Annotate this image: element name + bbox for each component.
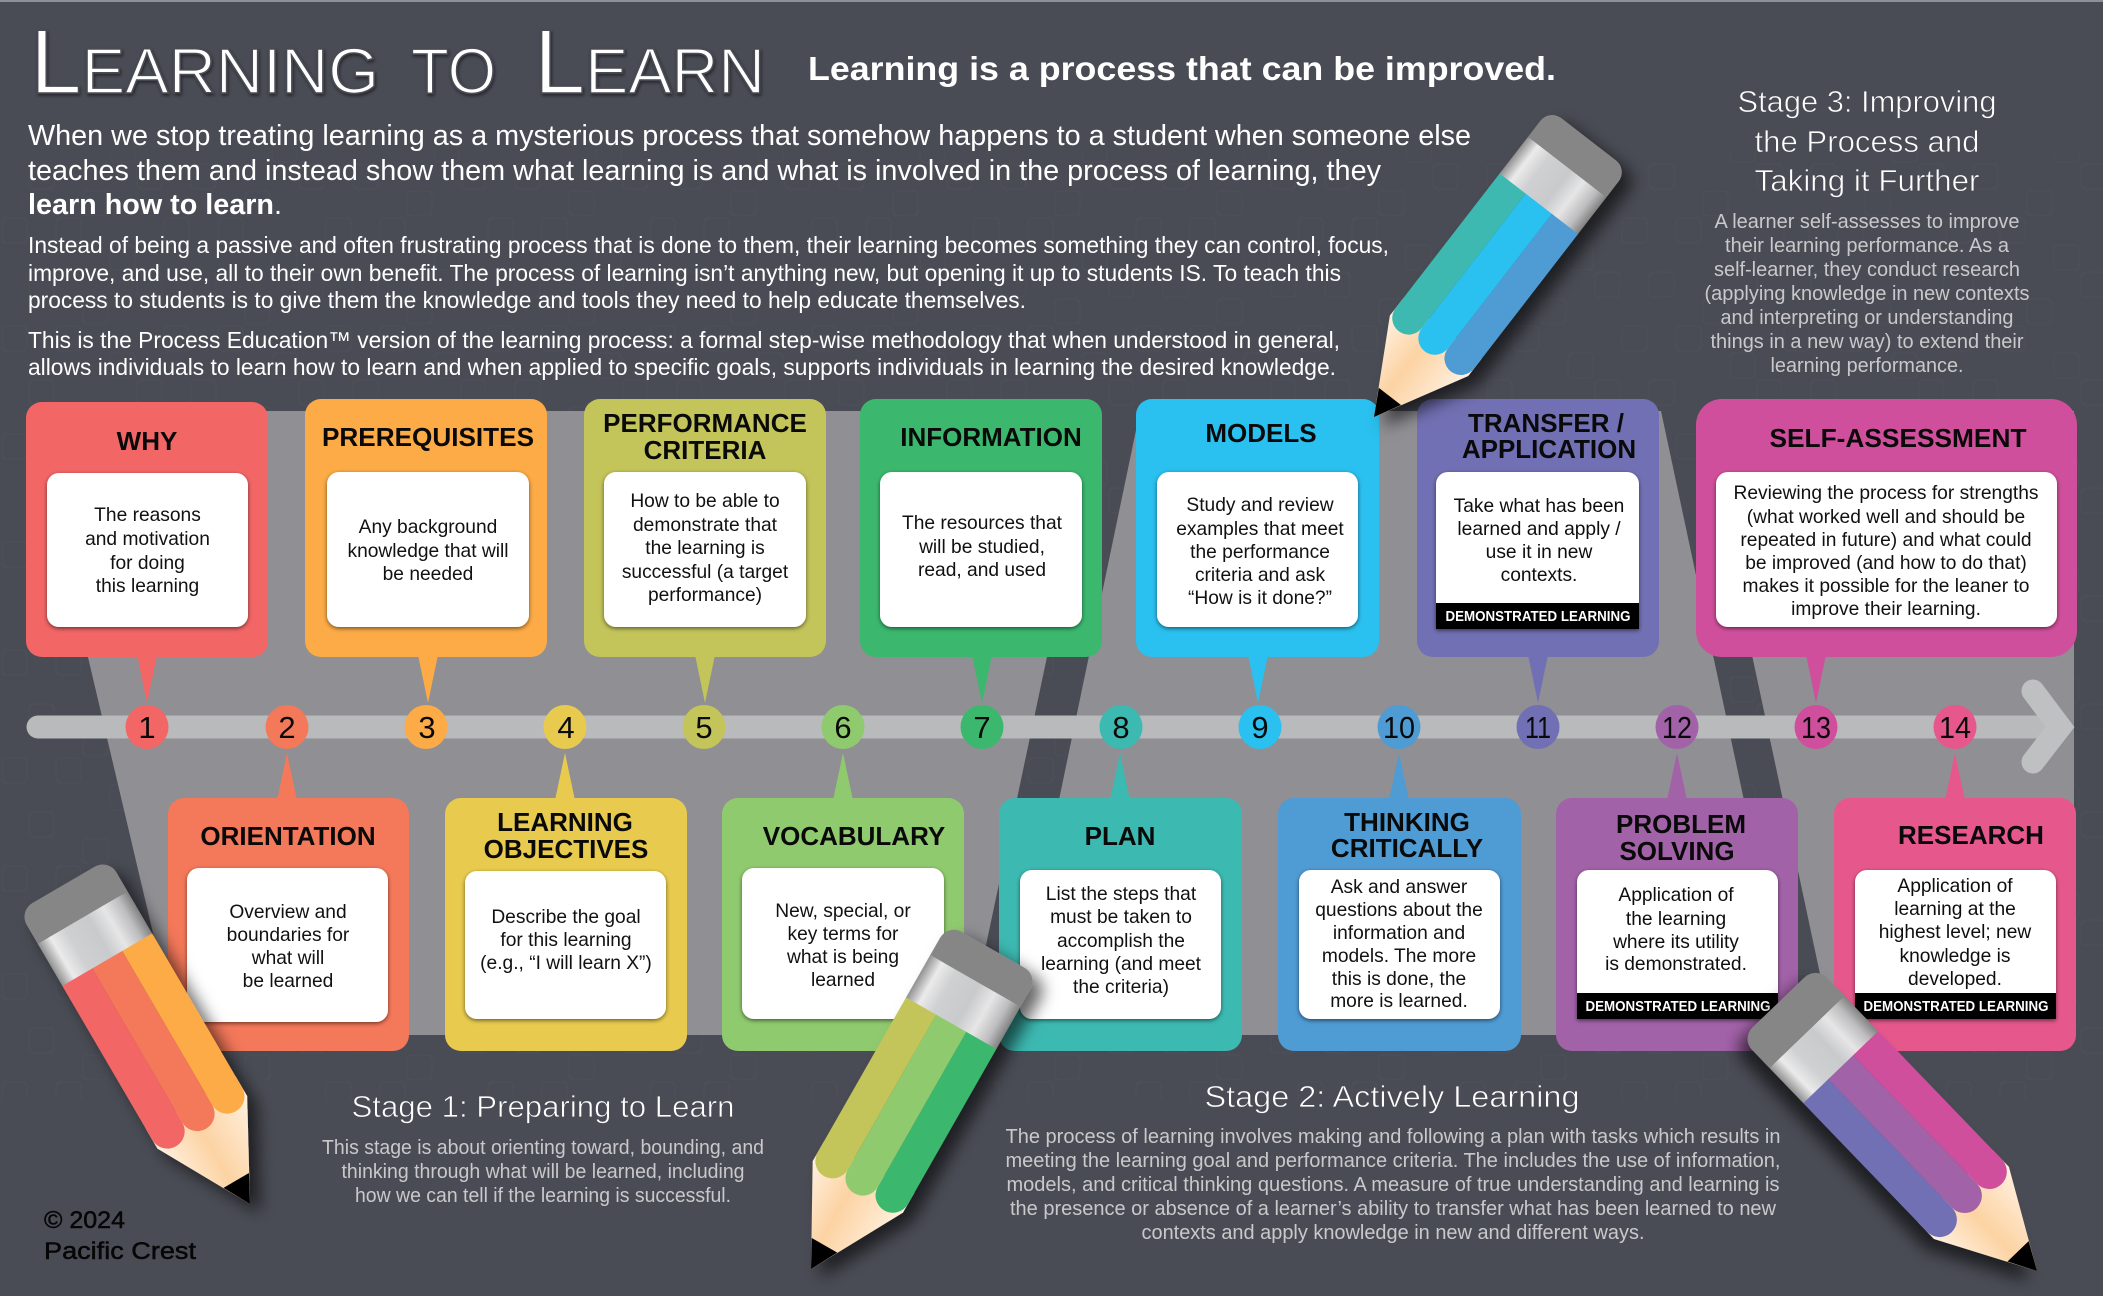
heading: ORIENTATION	[200, 821, 376, 851]
card: Ask and answer	[1331, 877, 1468, 898]
card	[880, 472, 1082, 627]
panel: step 14 research	[1834, 753, 2076, 1051]
panel: step 6 vocabulary	[722, 753, 964, 1051]
stage 2 description: models, and critical thinking questions. A measure of true understanding and learning is	[1006, 1174, 1780, 1196]
card	[1855, 870, 2056, 1019]
box	[1136, 399, 1379, 657]
timeline step numbers: 3	[418, 710, 436, 745]
card: accomplish the	[1057, 931, 1185, 952]
box	[168, 798, 409, 1051]
card: New, special, or	[775, 901, 911, 922]
card	[47, 473, 248, 627]
card: The resources that	[902, 513, 1063, 534]
card: (e.g., “I will learn X”)	[480, 953, 652, 974]
timeline step numbers: 1	[138, 710, 156, 745]
card: Reviewing the process for strengths	[1733, 483, 2039, 504]
card: “How is it done?”	[1188, 588, 1332, 609]
heading: THINKING	[1344, 807, 1470, 837]
heading: OBJECTIVES	[484, 834, 648, 864]
card: be needed	[383, 564, 473, 585]
body paragraph: process to students is to give them the knowledge and tools they need to help educate themselves.	[28, 287, 1026, 313]
timeline bar with arrow	[38, 691, 2060, 762]
heading: PLAN	[1085, 821, 1155, 851]
card: key terms for	[788, 924, 899, 945]
card: be learned	[243, 971, 333, 992]
panel: step 7 information	[860, 399, 1102, 703]
stage 1 description: how we can tell if the learning is successful.	[355, 1185, 731, 1207]
intro paragraph	[28, 120, 1471, 221]
title: LEARN	[534, 12, 765, 113]
heading: RESEARCH	[1898, 820, 2044, 850]
title: LEARNING	[30, 12, 379, 113]
box	[1417, 399, 1659, 657]
stage 3 description: self-learner, they conduct research	[1714, 259, 2020, 281]
panel: step 10 thinking critically	[1278, 753, 1521, 1051]
stage 1 description: This stage is about orienting toward, bounding, and	[322, 1137, 764, 1159]
pointer	[1388, 753, 1410, 805]
card: the performance	[1190, 542, 1330, 563]
card: highest level; new	[1879, 922, 2031, 943]
card: the learning	[1626, 909, 1726, 930]
subtitle: Learning is a process that can be improved.	[808, 50, 1556, 87]
heading: WHY	[117, 426, 177, 456]
heading	[484, 807, 648, 864]
box	[722, 798, 964, 1051]
stage 3 description	[1704, 211, 2030, 377]
card: where its utility	[1612, 932, 1739, 953]
card	[327, 472, 529, 627]
card: Study and review	[1186, 495, 1334, 516]
timeline step numbers: 4	[557, 710, 575, 745]
process education paragraph: This is the Process Education™ version of the learning process: a formal step-wise methodology that when understood in general,	[28, 327, 1340, 353]
card	[465, 871, 666, 1019]
card: the learning is	[645, 538, 765, 559]
copyright: © 2024	[44, 1207, 125, 1234]
card: must be taken to	[1050, 907, 1192, 928]
pointer	[1666, 753, 1688, 805]
card: Describe the goal	[491, 907, 641, 928]
heading: PREREQUISITES	[322, 422, 534, 452]
heading: PERFORMANCE	[603, 408, 807, 438]
card: learned and apply /	[1457, 519, 1621, 540]
stage 3 description: things in a new way) to extend their	[1710, 331, 2024, 353]
stage 3 heading: Taking it Further	[1754, 163, 1980, 198]
card: be improved (and how to do that)	[1745, 553, 2027, 574]
card	[1577, 870, 1778, 1019]
copyright	[44, 1207, 196, 1265]
card: How to be able to	[630, 491, 780, 512]
stage 3 heading: the Process and	[1754, 124, 1980, 159]
heading: PROBLEM	[1616, 809, 1746, 839]
stage 2 heading: Stage 2: Actively Learning	[1204, 1079, 1580, 1114]
card: Overview and	[229, 902, 347, 923]
card: for doing	[110, 553, 185, 574]
timeline step numbers: 12	[1662, 710, 1692, 745]
heading	[1462, 408, 1636, 464]
box	[1696, 399, 2077, 657]
card: and motivation	[85, 529, 210, 550]
pointer	[1805, 650, 1827, 703]
card	[742, 868, 944, 1019]
stage 1 description	[322, 1137, 764, 1207]
process education paragraph: allows individuals to learn how to learn and when applied to specific goals, supports individuals in learning the desired knowledge.	[28, 354, 1336, 380]
pointer	[276, 753, 298, 805]
timeline step numbers: 8	[1112, 710, 1130, 745]
card: contexts.	[1501, 565, 1577, 586]
icon: pencil olive green green	[766, 924, 1038, 1295]
box	[860, 399, 1102, 657]
icon: pencil teal cyan blue	[1335, 109, 1628, 447]
card: learning at the	[1894, 899, 2016, 920]
card: read, and used	[918, 560, 1046, 581]
card: DEMONSTRATED LEARNING	[1586, 999, 1770, 1015]
card: more is learned.	[1330, 991, 1468, 1012]
card: this learning	[96, 576, 199, 597]
heading	[603, 408, 807, 465]
card: The reasons	[94, 505, 201, 526]
card: what is being	[786, 947, 899, 968]
card	[604, 472, 806, 627]
panel: step 11 transfer / application	[1417, 399, 1659, 703]
copyright: Pacific Crest	[44, 1238, 196, 1265]
title	[30, 12, 765, 113]
intro paragraph: When we stop treating learning as a mysterious process that somehow happens to a student when someone else	[28, 120, 1471, 152]
card: this is done, the	[1332, 969, 1466, 990]
card: Application of	[1618, 885, 1734, 906]
card	[187, 868, 388, 1022]
pointer	[554, 753, 576, 805]
card: knowledge that will	[347, 541, 509, 562]
timeline step numbers: 11	[1525, 710, 1551, 745]
heading: TRANSFER /	[1468, 408, 1624, 438]
stage 3 description: A learner self-assesses to improve	[1714, 211, 2020, 233]
card: performance)	[648, 585, 762, 606]
box	[305, 399, 547, 657]
timeline step numbers: 6	[834, 710, 852, 745]
card: Any background	[359, 517, 497, 538]
stage 2 description: The process of learning involves making and following a plan with tasks which results in	[1006, 1126, 1780, 1148]
box	[1556, 798, 1798, 1051]
panel: step 12 problem solving	[1556, 753, 1798, 1051]
stage 1 heading: Stage 1: Preparing to Learn	[352, 1089, 734, 1124]
heading: VOCABULARY	[763, 821, 945, 851]
heading: CRITICALLY	[1331, 833, 1483, 863]
stage 3 description: and interpreting or understanding	[1720, 307, 2014, 329]
box	[1834, 798, 2076, 1051]
box	[1278, 798, 1521, 1051]
heading	[1616, 809, 1746, 866]
title: TO	[411, 35, 496, 107]
pointer	[971, 650, 993, 703]
stage 3 heading: Stage 3: Improving	[1738, 84, 1996, 119]
card: (what worked well and should be	[1747, 507, 2025, 528]
card: repeated in future) and what could	[1740, 530, 2032, 551]
stage 3 description: learning performance.	[1770, 355, 1964, 377]
box	[26, 402, 268, 657]
card: what will	[251, 948, 324, 969]
stage 3 description: (applying knowledge in new contexts	[1704, 283, 2030, 305]
stage 2 description: contexts and apply knowledge in new and different ways.	[1142, 1222, 1644, 1244]
card: criteria and ask	[1195, 565, 1325, 586]
card: Application of	[1897, 876, 2013, 897]
pointer	[1944, 753, 1966, 805]
card: the criteria)	[1073, 977, 1169, 998]
pointer	[694, 650, 716, 703]
card	[1436, 472, 1639, 629]
heading: INFORMATION	[900, 422, 1082, 452]
card: developed.	[1908, 969, 2002, 990]
card: boundaries for	[227, 925, 350, 946]
card: use it in new	[1486, 542, 1592, 563]
heading: CRITERIA	[644, 435, 767, 465]
card: Take what has been	[1454, 496, 1624, 517]
card: demonstrate that	[633, 515, 778, 536]
panel: step 5 performance criteria	[584, 399, 826, 703]
card: will be studied,	[918, 537, 1045, 558]
card: is demonstrated.	[1605, 954, 1747, 975]
panel: step 8 plan	[999, 753, 1242, 1051]
card: learning (and meet	[1041, 954, 1202, 975]
card: models. The more	[1322, 946, 1476, 967]
body paragraph: improve, and use, all to their own benefit. The process of learning isn’t anything new, but opening it up to students IS. To teach this	[28, 260, 1341, 286]
card: knowledge is	[1900, 946, 2010, 967]
panel: step 9 models	[1136, 399, 1379, 703]
timeline step numbers	[126, 705, 1976, 749]
card	[1157, 472, 1358, 627]
box	[999, 798, 1242, 1051]
card: makes it possible for the leaner to	[1743, 576, 2029, 597]
stage 2 description	[1006, 1126, 1780, 1244]
body paragraph	[28, 232, 1389, 313]
card: List the steps that	[1046, 884, 1197, 905]
stage 1 description: thinking through what will be learned, including	[342, 1161, 744, 1183]
stage 3 heading	[1738, 84, 1996, 198]
gray stage background bands	[30, 411, 2074, 1035]
heading: SOLVING	[1619, 836, 1735, 866]
card: DEMONSTRATED LEARNING	[1446, 609, 1630, 625]
card: DEMONSTRATED LEARNING	[1864, 999, 2048, 1015]
pointer	[1247, 650, 1269, 703]
box	[584, 399, 826, 657]
process education paragraph	[28, 327, 1340, 380]
panel: step 3 prerequisites	[305, 399, 547, 703]
panel: step 1 why	[26, 402, 268, 703]
intro paragraph: teaches them and instead show them what learning is and what is involved in the process of learning, they	[28, 155, 1382, 187]
card: examples that meet	[1176, 519, 1344, 540]
stage 3 description: their learning performance. As a	[1725, 235, 2010, 257]
heading: LEARNING	[497, 807, 633, 837]
icon: pencil indigo purple magenta	[1741, 966, 2074, 1296]
heading: APPLICATION	[1462, 434, 1636, 464]
pointer	[1527, 650, 1549, 703]
timeline step numbers: 5	[695, 710, 713, 745]
timeline step numbers: 14	[1939, 710, 1971, 745]
icon: pencil red coral orange	[19, 859, 295, 1230]
card: for this learning	[500, 930, 632, 951]
timeline step numbers: 13	[1801, 710, 1831, 745]
timeline step numbers: 9	[1251, 710, 1269, 745]
intro paragraph: learn how to learn.	[28, 189, 282, 221]
body paragraph: Instead of being a passive and often frustrating process that is done to them, their learning becomes something they can control, focus,	[28, 232, 1389, 258]
timeline step numbers: 2	[278, 710, 296, 745]
card: improve their learning.	[1791, 599, 1981, 620]
panel: step 13 self-assessment	[1696, 399, 2077, 703]
card: successful (a target	[622, 562, 789, 583]
card	[1299, 870, 1500, 1019]
timeline step numbers: 7	[973, 710, 991, 745]
stage 2 description: the presence or absence of a learner’s ability to transfer what has been learned to new	[1010, 1198, 1777, 1220]
heading: MODELS	[1205, 418, 1317, 448]
card	[1716, 472, 2057, 627]
card	[1020, 870, 1221, 1019]
pointer	[832, 753, 854, 805]
card: learned	[811, 970, 875, 991]
panel: step 2 orientation	[168, 753, 409, 1051]
timeline step numbers: 10	[1383, 710, 1415, 745]
heading: SELF-ASSESSMENT	[1770, 423, 2027, 453]
card: information and	[1333, 923, 1465, 944]
pointer	[1109, 753, 1131, 805]
pointer	[417, 650, 439, 703]
card: questions about the	[1315, 900, 1483, 921]
panel: step 4 learning objectives	[445, 753, 687, 1051]
pointer	[136, 650, 158, 703]
heading	[1331, 807, 1483, 863]
stage 2 description: meeting the learning goal and performance criteria. The includes the use of information,	[1006, 1150, 1780, 1172]
box	[445, 798, 687, 1051]
